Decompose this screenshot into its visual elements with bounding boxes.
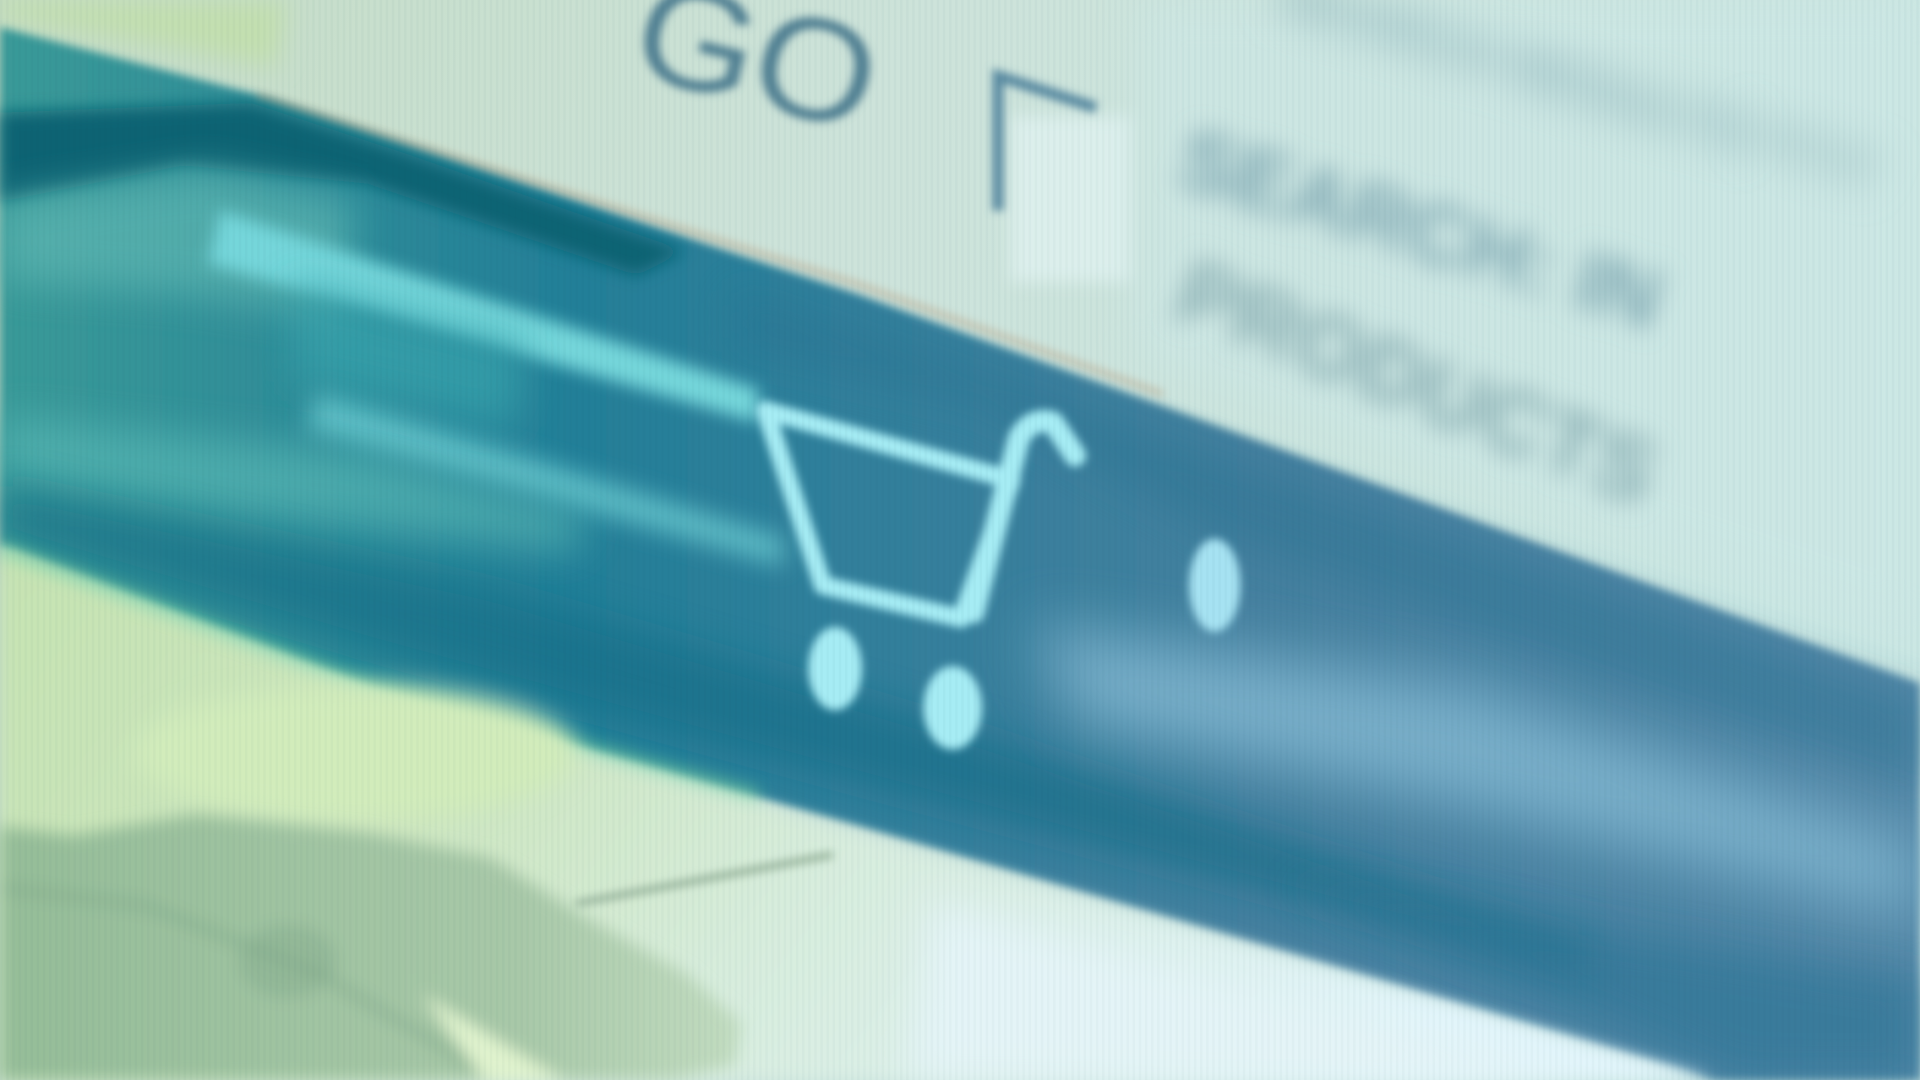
website header text: [620, 0, 1885, 525]
dark band stripe: [0, 103, 686, 276]
light lower-right streak: [1029, 624, 1920, 918]
white lower highlight: [906, 900, 1592, 1080]
separator dot: [1189, 539, 1240, 632]
knuckle shading: [239, 924, 337, 998]
green band edge: [0, 549, 759, 796]
second light streak: [306, 392, 784, 566]
cart basket: [765, 410, 1011, 618]
search box corner: [998, 76, 1096, 211]
teal upper-left area: [0, 171, 355, 318]
finger shadow: [0, 888, 490, 1080]
dark bottom right edge: [1286, 882, 1920, 1080]
dark blue upper band: [735, 288, 1920, 784]
left pale streaks: [0, 416, 588, 551]
cart handle: [973, 421, 1075, 612]
cart wheel left: [808, 627, 862, 710]
blurred search label second line: PRODUCTS: [1162, 241, 1671, 525]
top-left green corner: [0, 0, 288, 67]
desk edge line: [576, 855, 833, 904]
shopping cart icon: [765, 410, 1075, 749]
teal block: [294, 282, 527, 429]
pale search box: [1010, 116, 1133, 282]
mouse pad shape: [135, 686, 576, 820]
white card under fingertip: [422, 994, 563, 1080]
dark lower band streak: [0, 484, 1592, 980]
pale right panel: [1139, 0, 1920, 637]
blurred nav text right: VIEW: [1735, 101, 1885, 199]
light streak to cart: [208, 211, 759, 422]
cart wheel right: [923, 666, 982, 749]
blurred search label: SEARCH: IN: [1168, 110, 1674, 348]
lower desk area: [0, 551, 1714, 1080]
hand: [0, 814, 741, 1080]
orange edge highlight: [257, 96, 1163, 394]
